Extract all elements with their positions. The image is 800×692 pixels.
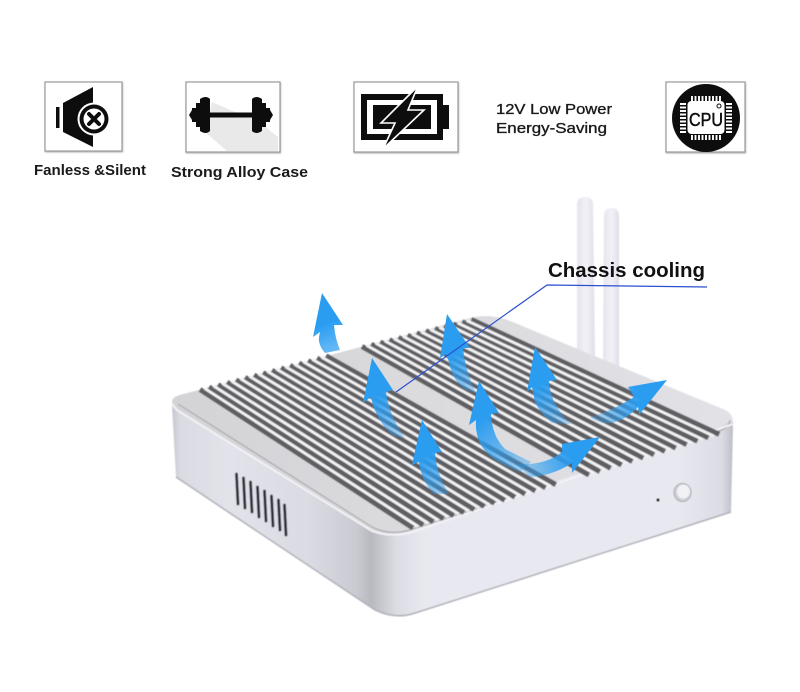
- vent slots: [236, 474, 286, 535]
- label: 12V Low Power Energy-Saving: 12V Low Power: [496, 101, 612, 118]
- icon: CPU chip: [666, 82, 745, 152]
- heat-sink fins: front block: [200, 356, 556, 528]
- label: 12V Low Power Energy-Saving: [496, 101, 612, 137]
- heat-sink fins: rear block: [362, 320, 719, 475]
- label: Fanless & Silent: Fanless &Silent: [34, 163, 146, 179]
- icon: CPU chip: CPU: [689, 110, 723, 130]
- arrow: right curve upward section: [527, 347, 571, 424]
- arrow: centre curve upward section: [469, 381, 531, 472]
- chassis side faces: [172, 316, 733, 616]
- antennas: [577, 197, 619, 368]
- arrow: front block right: [412, 420, 449, 494]
- icon: battery with lightning bolt: [354, 82, 458, 152]
- label: 12V Low Power Energy-Saving: Energy-Saving: [496, 120, 607, 137]
- arrow: centre curve rightward section: [515, 437, 600, 477]
- device: mini PC chassis: [172, 316, 733, 616]
- airflow arrows: [313, 293, 667, 494]
- power button: [674, 484, 691, 502]
- arrow: rising from rear edge: [313, 293, 343, 353]
- callout leader line: [396, 285, 707, 392]
- arrow: right curve rightward section: [590, 380, 667, 423]
- chassis top surface: [172, 316, 733, 533]
- power LED: [656, 498, 660, 502]
- arrow: front block left: [363, 358, 405, 438]
- icon: speaker muted (fanless): [45, 82, 122, 151]
- arrow: rear block top: [440, 314, 476, 393]
- icon: barbell (strong alloy case): [186, 82, 280, 152]
- callout: Chassis cooling: [396, 260, 707, 392]
- label: Strong Alloy Case: Strong Alloy Case: [171, 164, 308, 181]
- callout label: Chassis cooling: [548, 260, 705, 282]
